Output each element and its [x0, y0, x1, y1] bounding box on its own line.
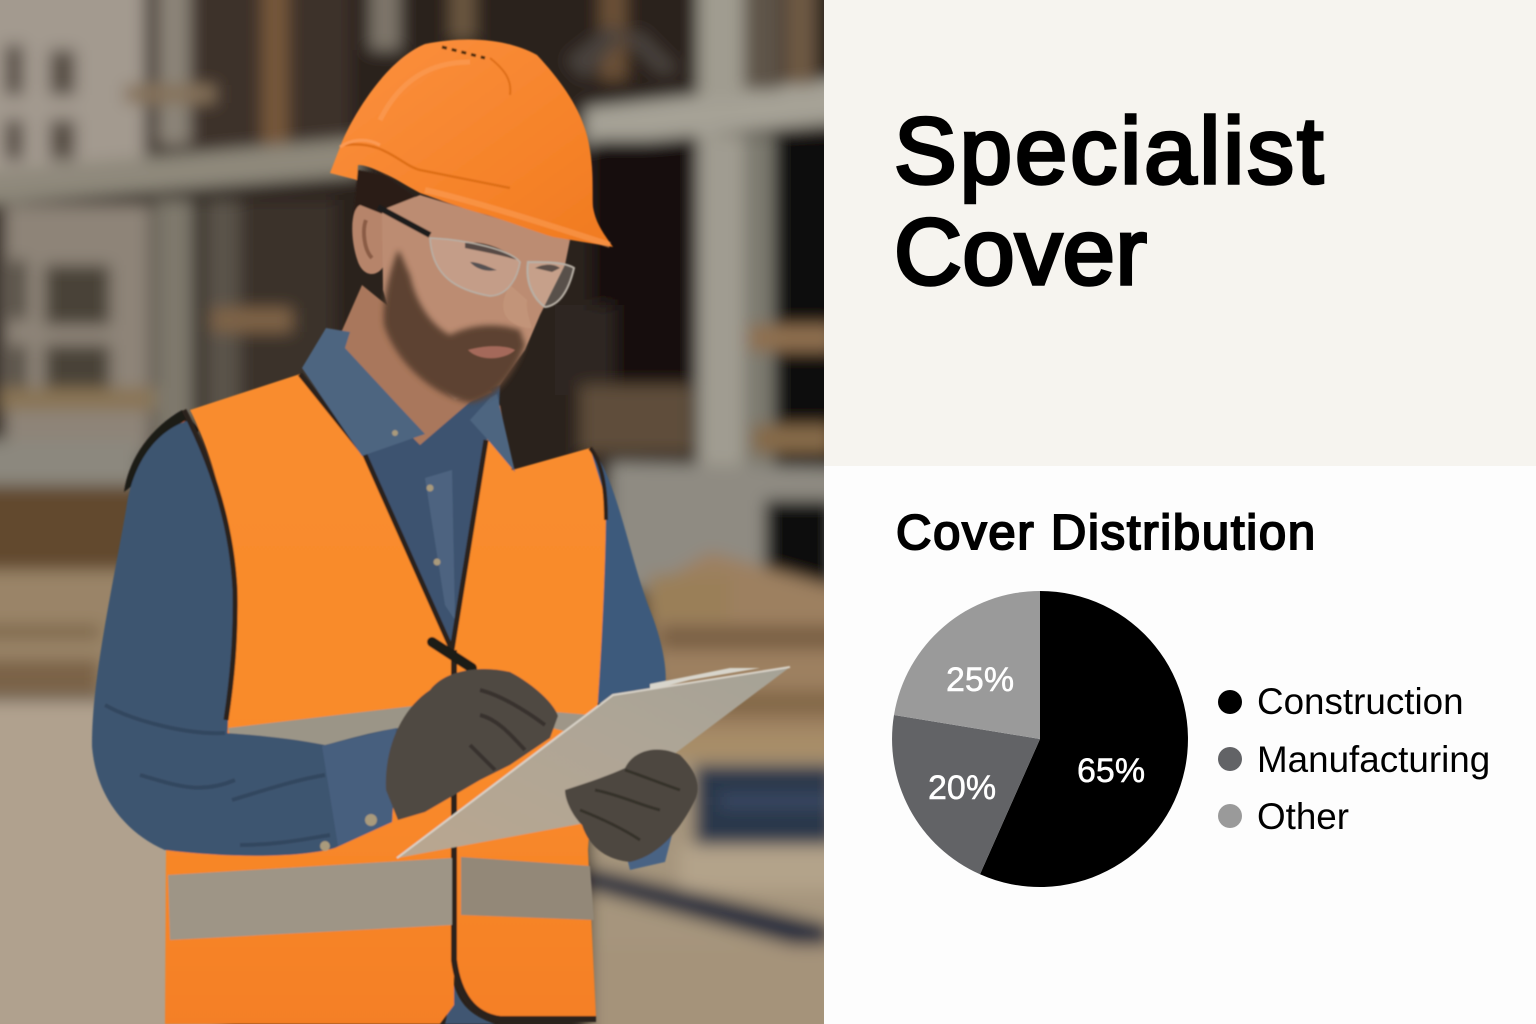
legend item: manufacturing: Manufacturing	[1257, 739, 1490, 780]
panel: cover distribution chart	[824, 466, 1536, 1024]
title: Specialist	[894, 98, 1326, 203]
slice: construction	[980, 591, 1188, 887]
blurred building site background	[0, 0, 850, 1024]
shirt buttons	[320, 430, 440, 851]
collar	[302, 328, 425, 456]
vest binding edges	[184, 374, 606, 1019]
vest	[165, 374, 606, 1024]
label: 20%: 20%	[928, 769, 996, 807]
shirt front	[340, 385, 500, 660]
face	[382, 195, 570, 400]
label: 25%: 25%	[946, 661, 1014, 699]
beard	[384, 250, 525, 403]
worker figure	[92, 40, 790, 1024]
legend item: other: Other	[1257, 796, 1349, 837]
reflective strips	[228, 704, 430, 750]
forearm sleeve in front of vest	[92, 700, 398, 856]
title: Cover	[894, 199, 1147, 304]
right arm sleeve	[590, 448, 666, 705]
pie chart	[892, 591, 1188, 887]
hair	[352, 170, 420, 225]
chart heading: Cover Distribution	[896, 506, 1317, 560]
hard hat highlights	[340, 58, 610, 245]
sleeve fold details	[105, 705, 330, 845]
photo: construction worker with clipboard	[0, 0, 824, 1024]
eyes and brows	[465, 242, 518, 260]
title	[894, 98, 1326, 304]
hard hat	[330, 40, 613, 247]
legend	[1218, 681, 1490, 837]
slice: other	[894, 591, 1040, 739]
clipboard	[397, 667, 790, 858]
nose	[503, 285, 531, 328]
neck	[330, 285, 492, 445]
pen	[432, 642, 472, 668]
slice: manufacturing	[892, 715, 1040, 874]
upper sleeve	[92, 420, 240, 850]
safety glasses	[378, 207, 574, 307]
writing glove	[386, 669, 558, 820]
cuff	[322, 728, 396, 846]
legend item: construction: Construction	[1257, 681, 1464, 722]
vest back behind shoulder	[124, 410, 200, 492]
holding glove	[565, 749, 698, 862]
panel: title	[824, 0, 1536, 466]
ear	[352, 205, 385, 274]
label: 65%: 65%	[1077, 752, 1145, 790]
